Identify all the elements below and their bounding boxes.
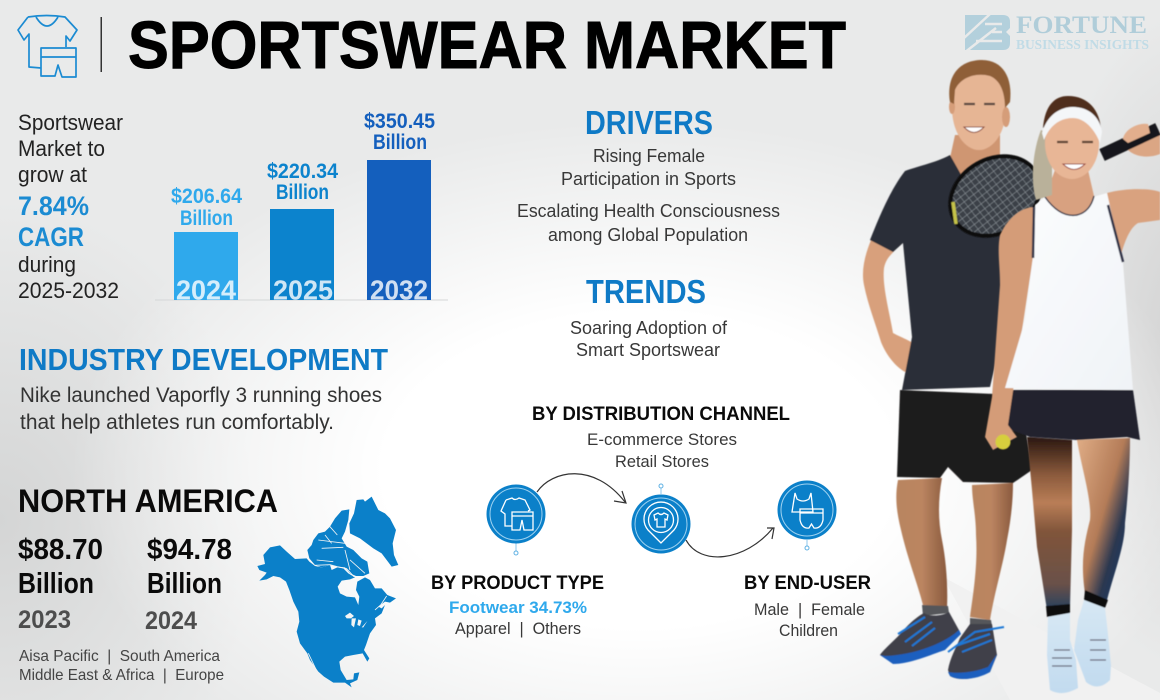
bar 2024: 2024 [176, 274, 236, 306]
bar 2032: Billion [373, 130, 427, 154]
icon: distribution channel [632, 484, 690, 554]
drivers [517, 104, 780, 245]
bar 2025 [267, 159, 338, 306]
logo: Fortune Business Insights: BUSINESS INSIGHTS [1016, 37, 1149, 52]
bar 2025: Billion [276, 180, 329, 204]
map: North America [257, 497, 398, 687]
photo: female athlete [985, 96, 1160, 693]
product type text: BY PRODUCT TYPE [431, 572, 604, 594]
icon: product type [486, 484, 546, 555]
end-user text: Children [779, 621, 838, 640]
CAGR text block: grow at [18, 162, 87, 187]
product type text [431, 572, 604, 638]
photo: tennis racket [936, 140, 1054, 252]
CAGR text block: during [18, 252, 76, 277]
title: SPORTSWEAR MARKET [128, 8, 846, 83]
drivers: Escalating Health Consciousness [517, 201, 780, 221]
bar 2032: 2032 [370, 274, 428, 306]
end-user text [744, 572, 871, 640]
CAGR text block: 7.84% [18, 191, 89, 221]
other regions: Middle East & Africa | Europe [19, 667, 224, 684]
bar 2032: $350.45 [364, 109, 435, 133]
distribution channel text: E-commerce Stores [587, 430, 737, 449]
bar 2025: 2025 [273, 274, 333, 306]
CAGR text block [18, 110, 123, 303]
end-user text: BY END-USER [744, 572, 871, 594]
divider [100, 17, 102, 72]
bar 2032 [364, 109, 435, 306]
photo: male athlete [863, 60, 1032, 679]
drivers: among Global Population [548, 225, 748, 245]
bar chart [155, 109, 448, 306]
north america stats: $94.78 [147, 534, 232, 566]
industry development: INDUSTRY DEVELOPMENT [19, 342, 388, 377]
bar 2024: Billion [180, 206, 233, 230]
drivers: Participation in Sports [561, 169, 736, 189]
trends: Smart Sportswear [576, 340, 720, 360]
icon: sportswear outline [18, 16, 77, 77]
industry development [19, 342, 388, 434]
logo: Fortune Business Insights [964, 12, 1149, 53]
distribution channel text: Retail Stores [615, 452, 709, 471]
other regions [19, 648, 224, 684]
CAGR text block: CAGR [18, 222, 84, 252]
trends [570, 273, 728, 360]
north america stats: 2023 [18, 606, 71, 634]
trends: TRENDS [586, 273, 706, 310]
icon: end-user [778, 480, 836, 550]
north america stats: Billion [18, 568, 94, 600]
north america stats: Billion [147, 568, 222, 600]
industry development: Nike launched Vaporfly 3 running shoes [20, 384, 382, 407]
north america stats: NORTH AMERICA [18, 483, 278, 519]
bar 2025: $220.34 [267, 159, 338, 183]
product type text: Apparel | Others [455, 619, 581, 638]
distribution channel text [532, 403, 790, 471]
drivers: DRIVERS [585, 104, 713, 141]
bar 2024: $206.64 [171, 184, 242, 208]
north america stats [18, 483, 278, 635]
product type text: Footwear 34.73% [449, 598, 587, 617]
distribution channel text: BY DISTRIBUTION CHANNEL [532, 403, 790, 425]
trends: Soaring Adoption of [570, 318, 728, 338]
drivers: Rising Female [593, 146, 705, 166]
CAGR text block: Sportswear [18, 110, 123, 135]
north america stats: $88.70 [18, 534, 103, 566]
CAGR text block: 2025-2032 [18, 278, 119, 303]
north america stats: 2024 [145, 607, 197, 635]
logo: Fortune Business Insights: FORTUNE [1016, 12, 1147, 39]
other regions: Aisa Pacific | South America [19, 648, 220, 665]
end-user text: Male | Female [754, 600, 865, 619]
industry development: that help athletes run comfortably. [20, 411, 334, 434]
CAGR text block: Market to [18, 136, 105, 161]
bar 2024 [171, 184, 242, 306]
flow arrows [537, 474, 774, 557]
